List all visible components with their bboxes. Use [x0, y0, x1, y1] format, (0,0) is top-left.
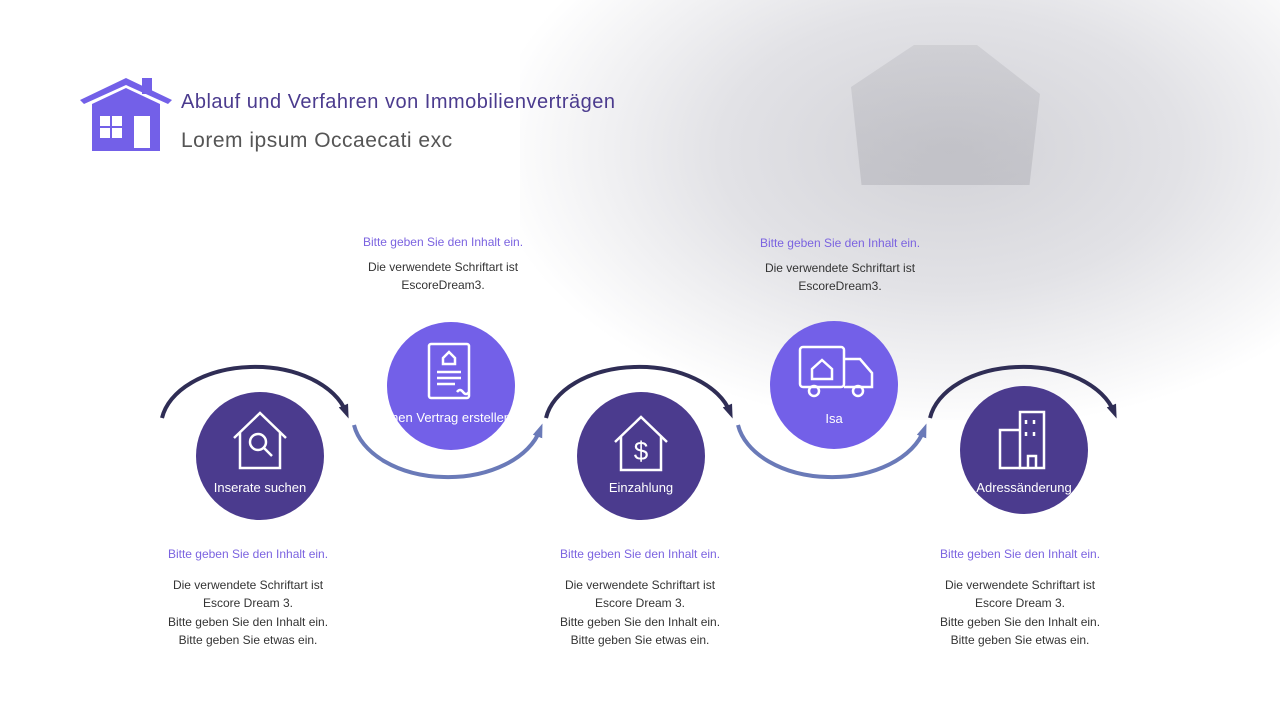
- text: step 5: Bitte geben Sie den Inhalt ein.: [940, 547, 1100, 561]
- text: step 1: Bitte geben Sie den Inhalt ein.: [168, 547, 328, 561]
- text: step 1: Escore Dream 3.: [203, 596, 293, 610]
- text: step 4: [760, 236, 920, 293]
- step 1 circle: Inserate suchen: [214, 480, 306, 495]
- text: step 3: Bitte geben Sie etwas ein.: [571, 633, 709, 647]
- text: step 5: Die verwendete Schriftart ist: [945, 578, 1095, 592]
- photo house: [830, 45, 1040, 185]
- text: step 3: Bitte geben Sie den Inhalt ein.: [560, 614, 720, 628]
- step 3 circle: Einzahlung: [609, 480, 673, 495]
- step 3 circle: [577, 392, 705, 520]
- step 1 circle: [196, 392, 324, 520]
- text: step 3: Bitte geben Sie den Inhalt ein.: [560, 547, 720, 561]
- text: step 4: EscoreDream3.: [798, 279, 882, 293]
- text: step 4: Die verwendete Schriftart ist: [765, 260, 915, 274]
- title: Ablauf und Verfahren von Immobilienverträgen: [181, 91, 615, 113]
- text: step 5: [940, 547, 1100, 647]
- text: step 1: Die verwendete Schriftart ist: [173, 578, 323, 592]
- text: step 1: [168, 547, 328, 647]
- step 4 circle: Isa: [825, 411, 843, 426]
- logo icon: [80, 78, 172, 151]
- text: step 2: Die verwendete Schriftart ist: [368, 260, 518, 274]
- step 4 circle: [770, 321, 898, 449]
- text: step 1: Bitte geben Sie den Inhalt ein.: [168, 614, 328, 628]
- step 2 circle: [387, 322, 515, 450]
- text: step 5: Bitte geben Sie etwas ein.: [951, 633, 1089, 647]
- text: step 3: Die verwendete Schriftart ist: [565, 578, 715, 592]
- text: step 4: Bitte geben Sie den Inhalt ein.: [760, 236, 920, 250]
- subtitle: Lorem ipsum Occaecati exc: [181, 129, 453, 152]
- background photo: [520, 0, 1280, 420]
- text: step 2: EscoreDream3.: [401, 278, 485, 292]
- text: step 2: Bitte geben Sie den Inhalt ein.: [363, 235, 523, 249]
- text: step 5: Escore Dream 3.: [975, 596, 1065, 610]
- step 5 circle: Adressänderung: [976, 480, 1072, 495]
- text: step 3: [560, 547, 720, 647]
- text: step 1: Bitte geben Sie etwas ein.: [179, 633, 317, 647]
- step 3 circle: $: [634, 436, 649, 466]
- text: step 2: [363, 235, 523, 292]
- step 5 circle: [960, 386, 1088, 514]
- text: step 3: Escore Dream 3.: [595, 596, 685, 610]
- text: step 5: Bitte geben Sie den Inhalt ein.: [940, 614, 1100, 628]
